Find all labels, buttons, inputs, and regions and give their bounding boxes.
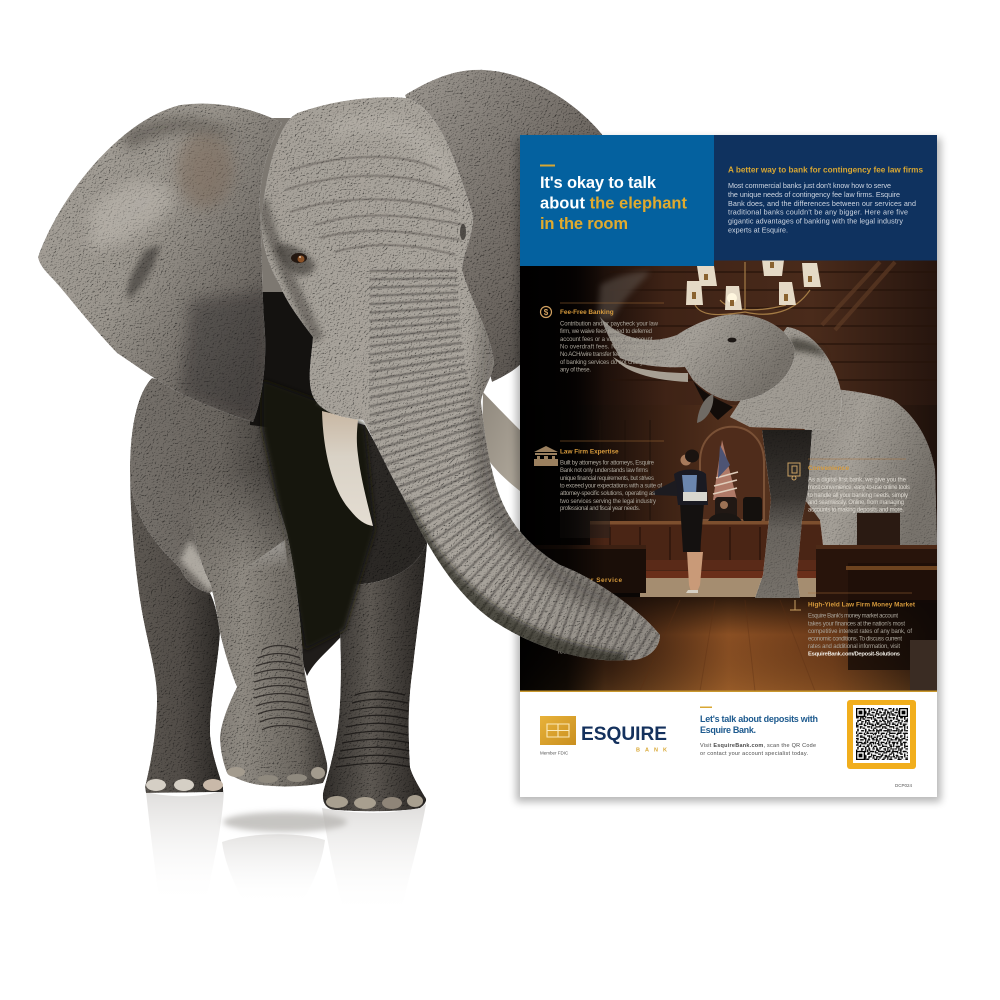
title: about the elephant bbox=[540, 194, 688, 212]
intro body: Bank does, and the differences between our services and bbox=[728, 199, 916, 208]
feature: high-yield money market bbox=[790, 593, 916, 658]
elephant neck behind head bbox=[248, 118, 325, 300]
left pews bbox=[534, 510, 646, 593]
elephant eye bbox=[275, 244, 316, 276]
poster shadow bbox=[516, 138, 941, 802]
feature: law firm expertise: professional and fiscal year needs. bbox=[560, 506, 640, 512]
logo bbox=[540, 716, 667, 756]
feature: law firm expertise bbox=[534, 441, 664, 512]
feature: high-yield money market: High-Yield Law Firm Money Market bbox=[808, 602, 916, 608]
elephant head and trunk bbox=[262, 97, 660, 660]
ear central fold bbox=[127, 245, 160, 300]
small elephant eye bbox=[728, 338, 736, 342]
elephant body bbox=[130, 378, 428, 600]
intro body: experts at Esquire. bbox=[728, 226, 788, 234]
intro body: gigantic advantages of banking with the legal industry bbox=[728, 216, 903, 226]
feature: customer service: fee and closing services bbox=[558, 650, 622, 656]
feature: high-yield money market: takes your finances at the nation's most bbox=[808, 622, 905, 628]
elephant right leg ankle wrinkles bbox=[336, 691, 410, 767]
small elephant upper trunk ghost bbox=[597, 272, 650, 320]
feature: law firm expertise: unique financial requirements, but strives bbox=[560, 476, 654, 482]
feature: customer service: telecommunications bbox=[558, 634, 611, 640]
call to action: or contact your account specialist today. bbox=[700, 751, 808, 757]
feature: fee-free banking: account fees or a variety of account. bbox=[560, 337, 654, 343]
intro body: Most commercial banks just don't know how to serve bbox=[728, 181, 891, 190]
flag bbox=[713, 440, 738, 500]
header panel: navy intro bbox=[714, 135, 937, 260]
feature: fee-free banking: No overdraft fees. No charges for bbox=[560, 344, 652, 350]
elephant near tusk bbox=[322, 411, 373, 526]
feature: customer service bbox=[558, 577, 622, 656]
small elephant rear dark area bbox=[857, 513, 900, 545]
small elephant ear shading bbox=[790, 338, 826, 358]
small elephant body bbox=[804, 390, 937, 545]
call to action: Visit EsquireBank.com, scan the QR Code bbox=[700, 743, 816, 749]
elephant ear folds and shading bbox=[90, 119, 270, 425]
elephant chest shadow solid base bbox=[250, 292, 320, 430]
feature: high-yield money market: competitive interest rates of any bank, of bbox=[808, 629, 912, 635]
call to action bbox=[700, 706, 818, 757]
feature: convenience: and seamlessly. Online, from managing bbox=[808, 500, 904, 506]
feature: convenience: to handle all your banking needs, simply bbox=[808, 493, 908, 499]
feature: convenience bbox=[788, 459, 910, 514]
panel: courtroom photo bbox=[520, 260, 937, 691]
feature: law firm expertise: Bank not only understands law firms bbox=[560, 468, 648, 474]
left dark fade bbox=[520, 318, 602, 690]
small elephant front leg bbox=[755, 430, 812, 598]
feature: high-yield money market: EsquireBank.com/Deposit-Solutions bbox=[808, 652, 900, 658]
intro heading: A better way to bank for contingency fee law firms bbox=[728, 166, 923, 174]
intro body: the unique needs of contingency fee law firms. Esquire bbox=[728, 190, 900, 199]
feature: fee-free banking: Contribution and/or paycheck your law bbox=[560, 322, 659, 328]
small elephant ear bbox=[730, 327, 841, 430]
ear top shadow bbox=[120, 119, 240, 150]
feature: high-yield money market: Esquire Bank's money market account bbox=[808, 614, 898, 620]
title: It's okay to talk bbox=[540, 174, 657, 192]
logo wordmark: ESQUIRE bbox=[581, 724, 667, 745]
intro body: traditional banks couldn't be any bigger. Here are five bbox=[728, 208, 908, 216]
floor bbox=[520, 597, 937, 691]
elephant far ear behind poster bbox=[405, 70, 604, 382]
elephant back leg bbox=[130, 470, 223, 793]
title accent bbox=[540, 164, 555, 166]
icon: dollar: $ bbox=[544, 308, 549, 317]
ceiling bbox=[590, 260, 937, 405]
courtroom wall bbox=[593, 405, 937, 537]
feature: law firm expertise: two services serving the legal industry bbox=[560, 499, 656, 505]
feature: convenience: most convenience, easy-to-use online tools bbox=[808, 485, 910, 491]
feature: fee-free banking: any of these. bbox=[560, 368, 591, 374]
feature: high-yield money market: rates and additional information, visit bbox=[808, 644, 900, 650]
elephant far eye bbox=[460, 224, 466, 240]
icon: bank note bbox=[790, 600, 801, 610]
feature: law firm expertise: attorney-specific solutions, operating as bbox=[560, 491, 655, 497]
chandelier bbox=[686, 260, 821, 315]
elephant near ear bbox=[38, 104, 282, 422]
ear brown patch bbox=[177, 132, 233, 208]
small elephant tusk bbox=[613, 357, 688, 382]
small elephant bbox=[597, 272, 937, 598]
ear highlight bbox=[90, 181, 175, 250]
elephant reflection on floor bbox=[146, 790, 426, 915]
woman lawyer bbox=[652, 450, 708, 593]
feature: fee-free banking bbox=[540, 303, 664, 374]
feature: law firm expertise: Law Firm Expertise bbox=[560, 448, 619, 456]
call to action: Esquire Bank. bbox=[700, 725, 756, 735]
title: in the room bbox=[540, 215, 628, 233]
member fdic: Member FDIC bbox=[540, 750, 569, 756]
elephant dark hind leg bbox=[285, 540, 345, 676]
feature: fee-free banking: No ACH/wire transfer fees. Our full suite bbox=[560, 352, 657, 358]
logo bank word: BANK bbox=[636, 748, 667, 754]
elephant chest shadow bbox=[262, 380, 375, 650]
feature: high-yield money market: economic conditions. To discuss current bbox=[808, 636, 902, 642]
feature: fee-free banking: of banking services do not charge for bbox=[560, 360, 654, 366]
elephant toes bbox=[146, 767, 423, 809]
feature: convenience: accounts to making deposits and more. bbox=[808, 508, 904, 514]
QR code bbox=[847, 700, 916, 769]
feature: fee-free banking: firm, we waive fees related to deferred bbox=[560, 329, 652, 335]
footer panel bbox=[520, 690, 937, 797]
feature: convenience: Convenience bbox=[808, 465, 849, 472]
elephant middle leg knee wrinkles bbox=[254, 646, 312, 730]
intro body bbox=[728, 181, 916, 234]
header panel: blue title bbox=[520, 135, 714, 266]
icon: courthouse bbox=[534, 446, 558, 466]
poster bbox=[520, 135, 937, 797]
feature: fee-free banking: Fee-Free Banking bbox=[560, 309, 614, 316]
judge bench bbox=[590, 521, 820, 597]
feature: customer service: Here's bbox=[558, 626, 575, 632]
small elephant head and trunk bbox=[600, 314, 795, 401]
elephant far tusk bbox=[482, 392, 524, 494]
feature: law firm expertise: to exceed your expectations with a suite of bbox=[560, 484, 662, 490]
elephant bbox=[38, 97, 660, 811]
elephant middle raised leg bbox=[188, 484, 328, 786]
logo mark bbox=[540, 716, 576, 745]
right pews bbox=[816, 545, 937, 690]
document code: DCP024 bbox=[895, 783, 913, 788]
elephant belly highlight bbox=[180, 540, 218, 592]
feature: customer service: Top-notch, we provide bbox=[558, 642, 617, 648]
heading: Customer Service bbox=[560, 577, 622, 584]
elephant trunk wrinkles and shading bbox=[262, 123, 650, 664]
feature: convenience: As a digital-first bank, we give you the bbox=[808, 478, 907, 484]
ear lower dark bbox=[180, 290, 270, 425]
title bbox=[540, 174, 688, 233]
judge bbox=[708, 497, 762, 522]
small elephant mouth bbox=[693, 381, 733, 420]
icon: devices bbox=[788, 463, 800, 480]
small elephant lower lip bbox=[697, 394, 713, 423]
elephant right front leg bbox=[323, 530, 428, 811]
feature: law firm expertise: Built by attorneys for attorneys, Esquire bbox=[560, 460, 655, 466]
call to action: Let's talk about deposits with bbox=[700, 714, 818, 724]
